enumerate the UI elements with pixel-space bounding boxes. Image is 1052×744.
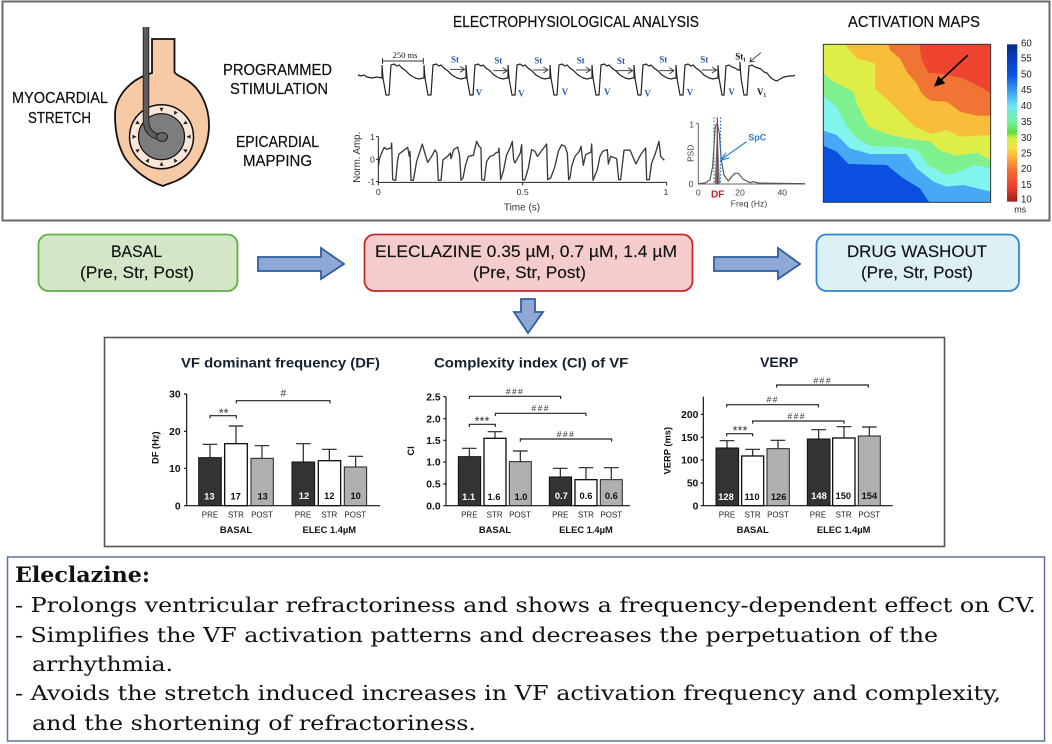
labels: St stimuli and V responses: St [577, 55, 585, 65]
box: drug washout: DRUG WASHOUT [847, 243, 987, 261]
chart: complexity index: PRE [461, 511, 478, 520]
panel: conclusions text [8, 557, 1044, 741]
label: myocardial stretch: MYOCARDIAL [12, 90, 108, 107]
arrow: activation direction [934, 55, 968, 87]
chart: PSD spectrum: SpC [748, 133, 767, 143]
label: programmed stimulation: STIMULATION [230, 81, 328, 98]
chart: VF dominant frequency: POST [251, 511, 273, 520]
labels: St stimuli and V responses: St₁ [735, 51, 746, 61]
chart: complexity index: 0.5 [426, 480, 441, 491]
legend: colour scale in ms [1007, 39, 1032, 214]
legend: colour scale in ms: 60 [1021, 39, 1032, 50]
chart: complexity index: PRE [552, 511, 569, 520]
chart: VF dominant frequency: STR [228, 511, 244, 520]
chart: VERP: 110 [744, 492, 760, 502]
labels: St stimuli and V responses: St [659, 54, 667, 64]
labels: St stimuli and V responses: V [476, 88, 483, 98]
chart: complexity index: 0.6 [605, 491, 618, 501]
bullet: activation patterns [15, 623, 938, 676]
chart: VERP: ## [767, 395, 779, 405]
chart: VERP: 148 [811, 491, 827, 501]
chart: VERP [663, 354, 893, 535]
chart: VERP: ELEC 1.4µM [817, 525, 871, 535]
legend: colour scale in ms: 10 [1021, 194, 1032, 205]
chart: VF dominant frequency: VF dominant frequency (DF) [181, 355, 380, 371]
chart: VF dominant frequency: 12 [299, 491, 309, 501]
chart: PSD spectrum: Freq (Hz) [731, 198, 767, 208]
chart: PSD spectrum: 40 [777, 188, 787, 198]
chart: complexity index: 1.0 [515, 492, 527, 502]
labels: St stimuli and V responses: V [728, 87, 735, 97]
labels: St stimuli and V responses: V [518, 89, 525, 99]
legend: colour scale in ms: 25 [1021, 149, 1032, 160]
chart: VF dominant frequency: ** [219, 407, 229, 421]
chart: VERP: 100 [681, 456, 699, 467]
chart: VERP: 0 [693, 501, 699, 512]
chart: PSD spectrum: 20 [735, 188, 745, 198]
chart: PSD spectrum: DF [711, 189, 724, 200]
arrow: eleclazine down to results [514, 299, 543, 333]
bullet: activation patterns: arrhythmia. [32, 652, 173, 676]
scale bar: 250 ms [382, 50, 423, 64]
labels: St stimuli and V responses [450, 51, 767, 99]
box: basal: (Pre, Str, Post) [80, 264, 194, 282]
chart: complexity index: ### [506, 386, 524, 396]
legend: colour scale in ms: 50 [1021, 69, 1032, 80]
chart: VERP: 128 [718, 492, 734, 502]
labels: St stimuli and V responses: V [644, 89, 651, 99]
chart: VERP: 150 [836, 491, 851, 501]
chart: VF dominant frequency: 30 [169, 390, 181, 401]
chart: complexity index: 1.1 [462, 492, 475, 502]
chart: VF dominant frequency: # [281, 389, 287, 400]
chart: VERP: VERP [760, 354, 798, 370]
chart: epicardial signal trace: Norm. Amp. [352, 132, 363, 183]
chart: complexity index: 2.5 [426, 392, 441, 403]
bullet: stretch effects: and the shortening of refractoriness. [32, 711, 476, 735]
chart: complexity index: 0.6 [579, 491, 592, 501]
chart: VERP: STR [836, 511, 852, 520]
chart: VERP: 126 [771, 492, 786, 502]
chart: complexity index: POST [509, 511, 531, 520]
chart: VF dominant frequency: 20 [169, 427, 181, 438]
heading: activation maps: ACTIVATION MAPS [848, 14, 980, 31]
label: myocardial stretch: STRETCH [28, 110, 91, 127]
chart: complexity index: ELEC 1.4µM [559, 525, 613, 535]
bullet: stretch effects [15, 681, 1001, 735]
chart: VF dominant frequency: 13 [257, 492, 268, 502]
chart: VF dominant frequency: 17 [230, 492, 241, 502]
label: myocardial stretch [12, 90, 108, 127]
legend: colour scale in ms: 20 [1021, 164, 1032, 175]
label: epicardial mapping: MAPPING [243, 153, 312, 170]
heading: eleclazine: Eleclazine: [15, 562, 150, 587]
chart: VF dominant frequency: 10 [169, 464, 181, 475]
chart: epicardial signal trace: 0.5 [517, 187, 529, 197]
arrow: eleclazine to washout [714, 248, 800, 279]
legend: colour scale in ms: 40 [1021, 101, 1032, 112]
chart: VERP: 50 [687, 479, 699, 490]
chart: complexity index: Complexity index (CI) of VF [434, 355, 629, 371]
arrow: basal to eleclazine [258, 248, 344, 279]
chart: programmed stimulation trace [358, 50, 795, 99]
chart: PSD spectrum [685, 117, 805, 208]
box: basal: BASAL [111, 243, 162, 261]
label: programmed stimulation: PROGRAMMED [223, 62, 332, 79]
label: epicardial mapping: EPICARDIAL [236, 134, 319, 151]
legend: colour scale in ms: 45 [1021, 85, 1032, 96]
bullet: refractoriness: - Prolongs ventricular refractoriness and shows a frequency-dependent effect on CV. [15, 593, 1036, 617]
chart: VERP: 150 [681, 433, 699, 444]
chart: VF dominant frequency: PRE [202, 511, 218, 520]
icon: heart with catheter [115, 27, 209, 186]
chart: VERP: ### [787, 411, 806, 421]
chart: VF dominant frequency [151, 355, 380, 535]
label: epicardial mapping [236, 134, 319, 170]
legend: colour scale in ms: 15 [1021, 180, 1032, 191]
label: programmed stimulation [223, 62, 332, 98]
chart: complexity index: STR [487, 511, 503, 520]
chart: PSD spectrum: 0 [696, 188, 701, 198]
chart: VF dominant frequency: POST [344, 511, 366, 520]
labels: St stimuli and V responses: St [494, 55, 502, 65]
box: drug washout: (Pre, Str, Post) [861, 264, 973, 282]
bullet: activation patterns: - Simplifies the VF activation patterns and decreases the perpetuation of the [15, 623, 938, 647]
chart: VERP: 200 [681, 410, 699, 421]
chart: complexity index: 1.6 [488, 492, 500, 502]
labels: St stimuli and V responses: V [687, 88, 694, 98]
chart: epicardial signal trace: 0 [376, 187, 381, 197]
chart: VERP: POST [858, 511, 880, 520]
heading: electrophysiological analysis: ELECTROPHYSIOLOGICAL ANALYSIS [453, 14, 699, 31]
chart: epicardial signal trace: 0 [370, 154, 375, 164]
chart: epicardial signal trace: -1 [367, 177, 375, 187]
chart: activation heat map [823, 44, 991, 202]
box: eleclazine: ELECLAZINE 0.35 µM, 0.7 µM, 1.4 µM [375, 243, 677, 261]
legend: colour scale in ms: 35 [1021, 117, 1032, 128]
chart: VF dominant frequency: STR [321, 511, 338, 520]
chart: complexity index: 1.0 [426, 458, 441, 469]
chart: complexity index: ### [531, 403, 550, 413]
box: drug washout [816, 234, 1019, 291]
chart: VF dominant frequency: 0 [175, 501, 181, 512]
chart: VERP: POST [767, 511, 789, 520]
labels: St stimuli and V responses: St [700, 54, 708, 64]
panel: top experimental setup [2, 2, 1050, 220]
chart: VF dominant frequency: 13 [204, 492, 215, 502]
chart: complexity index: ### [557, 429, 575, 439]
box: eleclazine: (Pre, Str, Post) [473, 264, 586, 282]
chart: complexity index: *** [475, 415, 489, 429]
chart: VF dominant frequency: 10 [350, 491, 361, 501]
labels: St stimuli and V responses: St [534, 55, 542, 65]
chart: VF dominant frequency: DF (Hz) [151, 431, 161, 464]
box: basal [38, 234, 238, 291]
chart: epicardial signal trace: 1 [370, 132, 375, 142]
legend: colour scale in ms: ms [1014, 204, 1027, 214]
box: eleclazine [364, 234, 692, 291]
chart: VERP: STR [745, 511, 761, 520]
chart: epicardial signal trace: Time (s) [504, 202, 540, 213]
chart: PSD spectrum: PSD [685, 145, 695, 162]
chart: VF dominant frequency: 12 [324, 491, 335, 501]
labels: St stimuli and V responses: V₁ [757, 87, 767, 97]
chart: VF dominant frequency: BASAL [220, 525, 252, 535]
chart: VF dominant frequency: PRE [295, 511, 311, 520]
labels: St stimuli and V responses: St [451, 54, 459, 64]
chart: VERP: VERP (ms) [663, 427, 673, 474]
chart: epicardial signal trace: 1 [664, 187, 669, 197]
chart: epicardial signal trace [352, 132, 669, 213]
chart: complexity index: 0.0 [426, 501, 441, 512]
chart: complexity index [406, 355, 630, 535]
chart: complexity index: CI [406, 446, 416, 456]
chart: VERP: *** [733, 424, 747, 438]
chart: VERP: 154 [862, 491, 878, 501]
chart: VERP: PRE [719, 511, 735, 520]
labels: St stimuli and V responses: St [617, 56, 625, 66]
labels: St stimuli and V responses: V [562, 87, 569, 97]
chart: complexity index: 1.5 [426, 436, 441, 447]
legend: colour scale in ms: 30 [1021, 133, 1032, 144]
chart: complexity index: 0.7 [555, 491, 568, 501]
labels: St stimuli and V responses: V [604, 87, 611, 97]
scale bar: 250 ms: 250 ms [393, 50, 417, 60]
chart: VF dominant frequency: ELEC 1.4µM [303, 525, 356, 535]
chart: complexity index: 2.0 [426, 414, 441, 425]
chart: complexity index: POST [600, 511, 622, 520]
panel: results charts [104, 338, 944, 546]
bullet: stretch effects: - Avoids the stretch induced increases in VF activation frequency and complexity, [15, 681, 1001, 705]
legend: colour scale in ms: 55 [1021, 53, 1032, 64]
chart: VERP: BASAL [737, 525, 769, 535]
chart: PSD spectrum: 0 [689, 179, 694, 189]
chart: VERP: ### [813, 375, 832, 385]
chart: complexity index: BASAL [479, 525, 511, 535]
chart: PSD spectrum: 1 [689, 119, 694, 129]
chart: VERP: PRE [810, 511, 826, 520]
chart: complexity index: STR [578, 511, 594, 520]
